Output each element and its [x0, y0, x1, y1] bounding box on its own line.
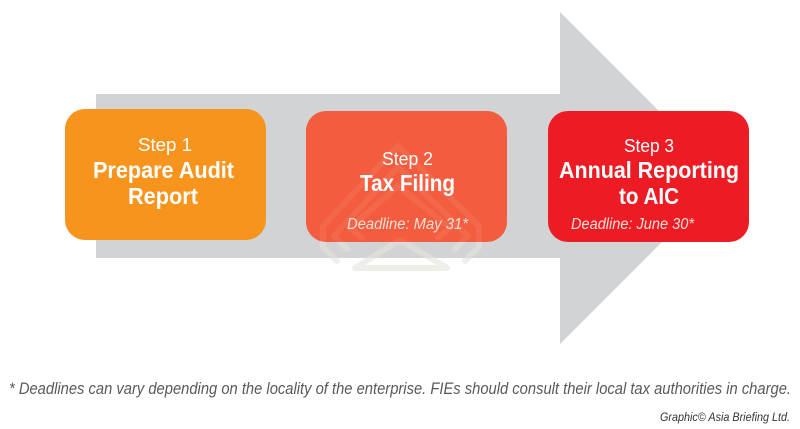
step 1 title: Report	[128, 183, 198, 209]
step 1 title: Prepare Audit	[93, 157, 234, 183]
step 1 label: Step 1	[138, 135, 192, 155]
grey arrow	[96, 12, 726, 344]
panel: step 2	[306, 111, 507, 242]
icon: watermark logo	[323, 146, 479, 268]
step 2 deadline: Deadline: May 31*	[347, 216, 469, 233]
step 3 title: to AIC	[619, 183, 679, 209]
step 2 label: Step 2	[382, 149, 433, 169]
panel: step 1	[65, 109, 266, 240]
step 3 title: Annual Reporting	[559, 157, 739, 183]
step 3 label: Step 3	[624, 136, 674, 156]
watermark over box	[320, 143, 482, 242]
step 2 title: Tax Filing	[360, 170, 455, 196]
panel: step 3	[548, 111, 749, 242]
step 3 deadline: Deadline: June 30*	[571, 216, 695, 233]
